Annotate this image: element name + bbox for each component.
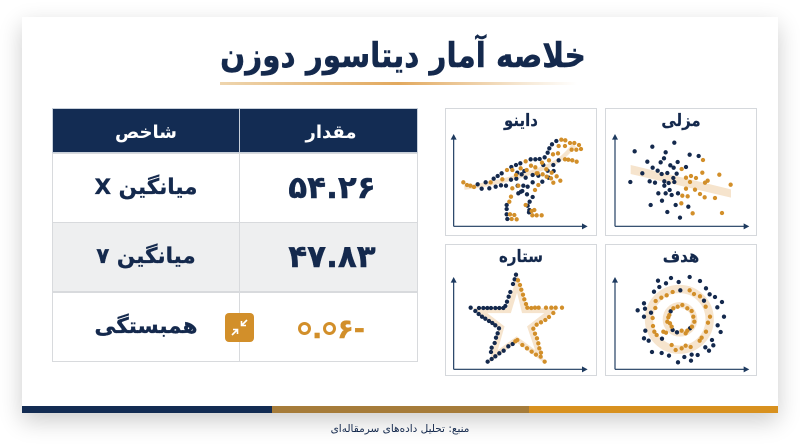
header: value: مقدار bbox=[305, 122, 357, 142]
panel title: dino: داینو bbox=[504, 111, 538, 131]
value: mean X: ۵۴.۲۶ bbox=[288, 170, 376, 206]
panel: star bbox=[445, 244, 597, 376]
chart: star bbox=[451, 275, 588, 372]
panel title: star: ستاره bbox=[499, 247, 543, 267]
label: mean Y: میانگین ۷ bbox=[96, 244, 196, 269]
chart: slanted bbox=[612, 134, 749, 229]
value: correlation bbox=[239, 292, 418, 362]
source note: منبع: تحلیل داده‌های سرمقاله‌ای bbox=[331, 423, 469, 435]
panel: target bbox=[605, 244, 757, 376]
label: mean X bbox=[52, 153, 240, 223]
chart: dino bbox=[451, 134, 588, 229]
label: mean X: میانگین X bbox=[95, 175, 197, 200]
value: mean Y bbox=[239, 222, 418, 292]
title: خلاصه آمار دیتاسور دوزن bbox=[220, 36, 586, 76]
value: mean Y: ۴۷.۸۳ bbox=[288, 238, 376, 274]
value: mean X bbox=[239, 153, 418, 223]
value: correlation: -. ۶ bbox=[312, 314, 365, 345]
label: mean Y bbox=[52, 222, 240, 292]
panel: dino bbox=[445, 108, 597, 236]
panel title: target: هدف bbox=[663, 247, 699, 267]
label: correlation: همبستگی bbox=[94, 314, 198, 339]
panel: slanted bbox=[605, 108, 757, 236]
chart: target bbox=[612, 277, 749, 372]
title underline bbox=[220, 82, 577, 85]
panel title: slanted: مزلی bbox=[661, 111, 701, 131]
footer bar bbox=[22, 406, 778, 413]
label: correlation bbox=[52, 292, 240, 362]
header: metric: شاخص bbox=[115, 122, 177, 142]
header: metric bbox=[52, 108, 240, 153]
icon: inward arrows bbox=[225, 313, 254, 342]
header: value bbox=[239, 108, 418, 153]
summary table bbox=[52, 108, 418, 362]
